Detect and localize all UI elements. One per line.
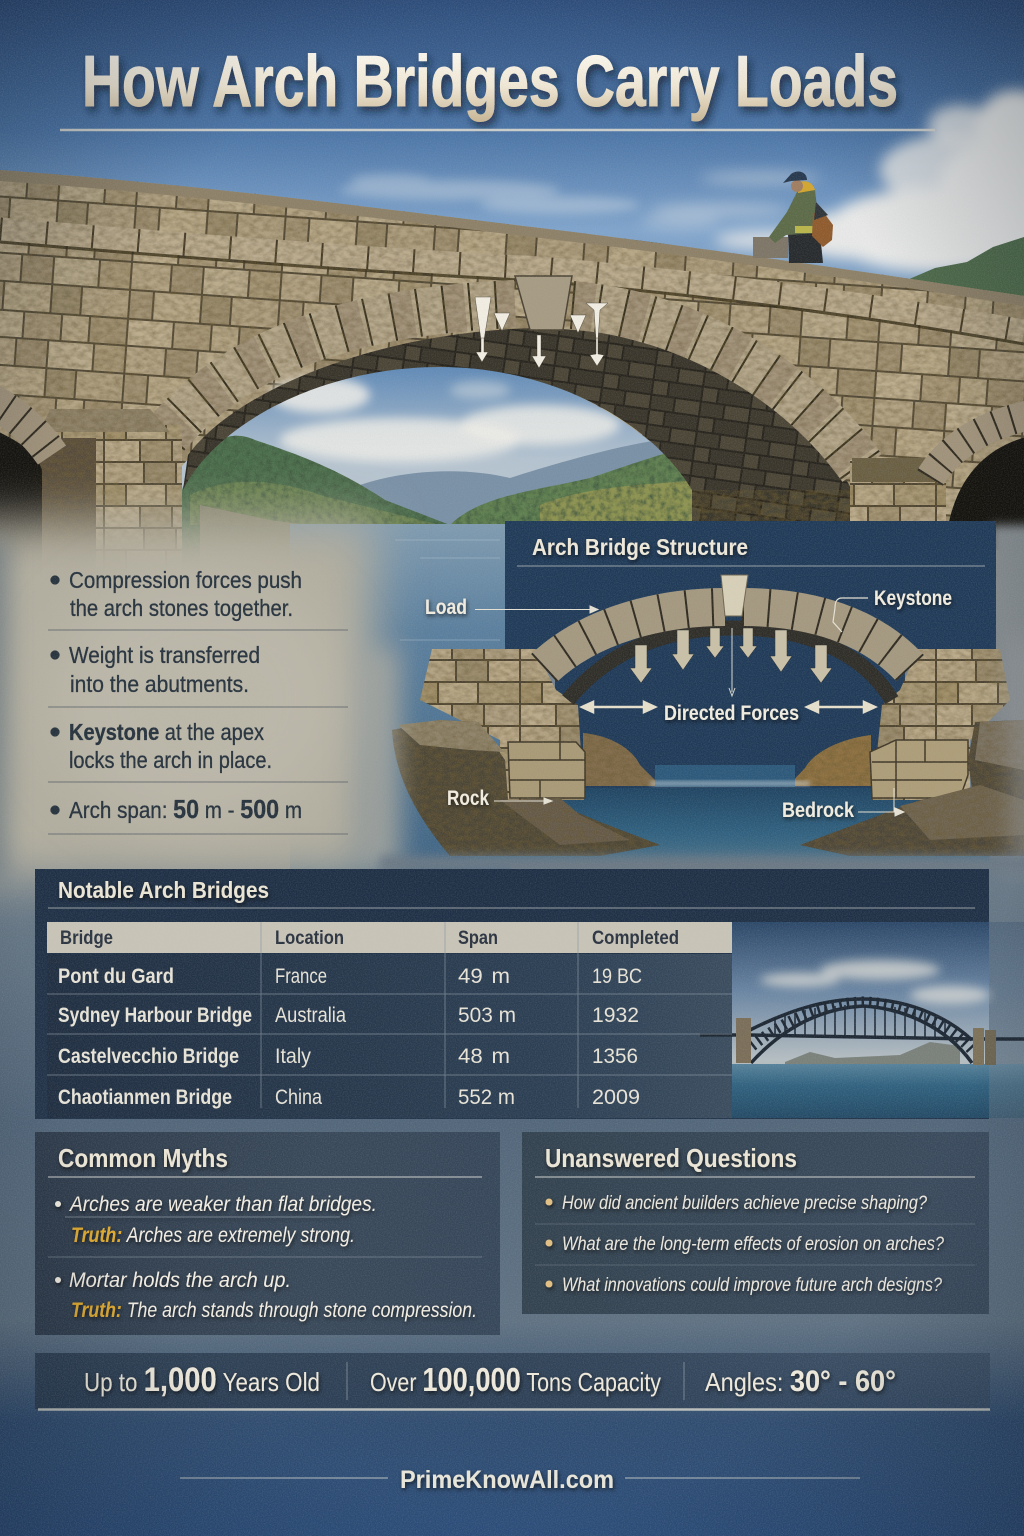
right adjoining arch <box>930 415 1024 550</box>
myth: mortar holds the arch <box>55 1269 477 1322</box>
panel: unanswered questions <box>522 1132 989 1314</box>
table row: Castelvecchio Bridge: Castelvecchio Bridge <box>58 1045 239 1068</box>
table row: Sydney Harbour Bridge: Australia <box>275 1004 346 1027</box>
table row: Chaotianmen Bridge: 2009 <box>592 1086 640 1109</box>
table row: Castelvecchio Bridge: 1356 <box>592 1045 638 1068</box>
diagram: rock outcrop right, inside opening <box>788 735 871 786</box>
table row: Pont du Gard: 49 m <box>458 965 510 988</box>
diagram: downward force arrows <box>630 628 832 683</box>
footer website: PrimeKnowAll.com <box>400 1466 614 1494</box>
image: steel arch bridge over water <box>700 922 1024 1118</box>
arch voussoir ring <box>166 304 862 468</box>
bullet: weight transfer: Weight is transferred <box>69 642 260 668</box>
faint clouds above the bridge centre <box>340 174 640 214</box>
bullet: compression forces: the arch stones together. <box>70 595 293 621</box>
bullet: keystone: locks the arch in place. <box>69 747 272 773</box>
label: rock: Rock <box>447 787 489 810</box>
bridge wall masonry <box>0 170 1024 600</box>
table row: Chaotianmen Bridge: Chaotianmen Bridge <box>58 1086 232 1109</box>
table row: Castelvecchio Bridge: 48 m <box>458 1045 510 1068</box>
diagram: rock outcrop left, inside opening <box>583 733 661 786</box>
bullet: weight transfer: into the abutments. <box>70 671 249 697</box>
panel: notable arch bridges <box>35 869 1024 1119</box>
diagram: foreground rocks left <box>392 720 660 856</box>
table row: Pont du Gard <box>58 965 642 988</box>
diagram: right abutment wall <box>872 649 1010 800</box>
heading: unanswered questions: Unanswered Questions <box>545 1143 797 1173</box>
question: future innovations: What innovations could improve future arch designs? <box>562 1275 942 1296</box>
stats bar <box>35 1353 990 1410</box>
river landscape through the arch <box>170 365 700 600</box>
table row: Chaotianmen Bridge <box>58 1086 640 1109</box>
table header row: Location <box>275 928 344 949</box>
bullet: keystone <box>50 719 272 773</box>
compression arrows on the bridge arch <box>475 297 608 368</box>
diagram: right horizontal force arrow <box>807 702 875 712</box>
label: rock <box>447 787 552 810</box>
panel: common myths <box>35 1132 500 1335</box>
table row: Sydney Harbour Bridge: 1932 <box>592 1004 639 1027</box>
diagram: arch underside band <box>568 628 892 700</box>
myth: mortar holds the arch: Truth: The arch stands through stone compression. <box>71 1299 477 1322</box>
diagram: arch ring stones <box>544 607 910 668</box>
table row: Sydney Harbour Bridge <box>58 1004 639 1027</box>
label: bedrock <box>782 788 904 822</box>
diagram: keystone block <box>721 575 748 616</box>
label: bedrock: Bedrock <box>782 799 854 822</box>
label: keystone: Keystone <box>874 587 952 610</box>
question: erosion effects: What are the long-term effects of erosion on arches? <box>562 1234 944 1255</box>
haze at the right edge of the page <box>990 525 1024 725</box>
stat: capacity: Over 100,000 Tons Capacity <box>370 1361 661 1398</box>
heading: notable arch bridges: Notable Arch Bridges <box>58 877 269 903</box>
right pier <box>692 458 946 550</box>
heading: common myths: Common Myths <box>58 1143 228 1173</box>
arch barrel underside <box>183 328 852 510</box>
diagram: arch bridge cross-section <box>392 575 1024 863</box>
table header row <box>47 922 732 953</box>
table: bridge spans and dates <box>47 922 732 1118</box>
diagram: water under the arch <box>470 765 990 863</box>
bullet: arch span: Arch span: 50 m - 500 m <box>69 794 302 824</box>
keystone <box>515 276 572 330</box>
myth: mortar holds the arch: Mortar holds the arch up. <box>69 1269 291 1292</box>
worker walking on the bridge <box>753 172 833 263</box>
table row: Castelvecchio Bridge <box>58 1045 638 1068</box>
river beside the explanatory panels <box>290 524 510 874</box>
diagram: foreground rocks right <box>800 720 1024 856</box>
label: keystone <box>833 587 952 632</box>
bullet: keystone: Keystone at the apex <box>69 719 264 745</box>
stone bridge <box>0 170 1024 600</box>
panel: haze behind compression notes <box>0 520 375 880</box>
clouds in the sky <box>640 90 1024 272</box>
distant hill behind the bridge <box>907 237 1024 320</box>
bullet: compression forces <box>50 567 302 621</box>
panel: key compression facts <box>48 567 348 834</box>
parapet coping <box>0 170 1024 306</box>
left adjoining arch <box>0 400 52 600</box>
table row: Pont du Gard: 19 BC <box>592 965 642 988</box>
table row: Castelvecchio Bridge: Italy <box>275 1045 311 1068</box>
table row: Chaotianmen Bridge: 552 m <box>458 1086 515 1109</box>
stat: angles: Angles: 30° - 60° <box>705 1365 896 1398</box>
table row: Pont du Gard: Pont du Gard <box>58 965 174 988</box>
label: load: Load <box>425 596 467 619</box>
diagram: centre force line <box>729 628 735 696</box>
diagram: right abutment blocks <box>870 740 968 798</box>
table header row: Span <box>458 928 498 949</box>
stat: age: Up to 1,000 Years Old <box>84 1361 320 1399</box>
heading: arch bridge structure: Arch Bridge Structure <box>532 534 748 560</box>
string course <box>0 229 1024 344</box>
table header row: Completed <box>592 928 679 949</box>
myth: arches are weaker: Arches are weaker than flat bridges. <box>68 1193 377 1216</box>
bullet: weight transfer <box>50 642 260 697</box>
panel: arch bridge structure header <box>505 521 996 649</box>
diagram: left abutment wall <box>420 649 584 800</box>
table header row: Bridge <box>60 928 113 949</box>
table row: Sydney Harbour Bridge: Sydney Harbour Bridge <box>58 1004 252 1027</box>
haze softening diagram edges <box>360 640 1024 872</box>
label: directed forces: Directed Forces <box>664 702 799 725</box>
title underline <box>60 129 935 131</box>
question: precise shaping: How did ancient builders achieve precise shaping? <box>562 1193 927 1214</box>
bullet: compression forces: Compression forces push <box>69 567 302 593</box>
diagram: left abutment blocks <box>508 742 585 798</box>
table row: Pont du Gard: France <box>275 965 327 988</box>
left pier <box>40 409 182 600</box>
label: load <box>425 596 598 619</box>
table row: Sydney Harbour Bridge: 503 m <box>458 1004 516 1027</box>
table row: Chaotianmen Bridge: China <box>275 1086 322 1109</box>
myth: arches are weaker: Truth: Arches are extremely strong. <box>71 1224 355 1247</box>
diagram: dark interior under the arch <box>555 649 905 800</box>
diagram: left horizontal force arrow <box>582 702 655 712</box>
myth: arches are weaker <box>55 1193 377 1247</box>
